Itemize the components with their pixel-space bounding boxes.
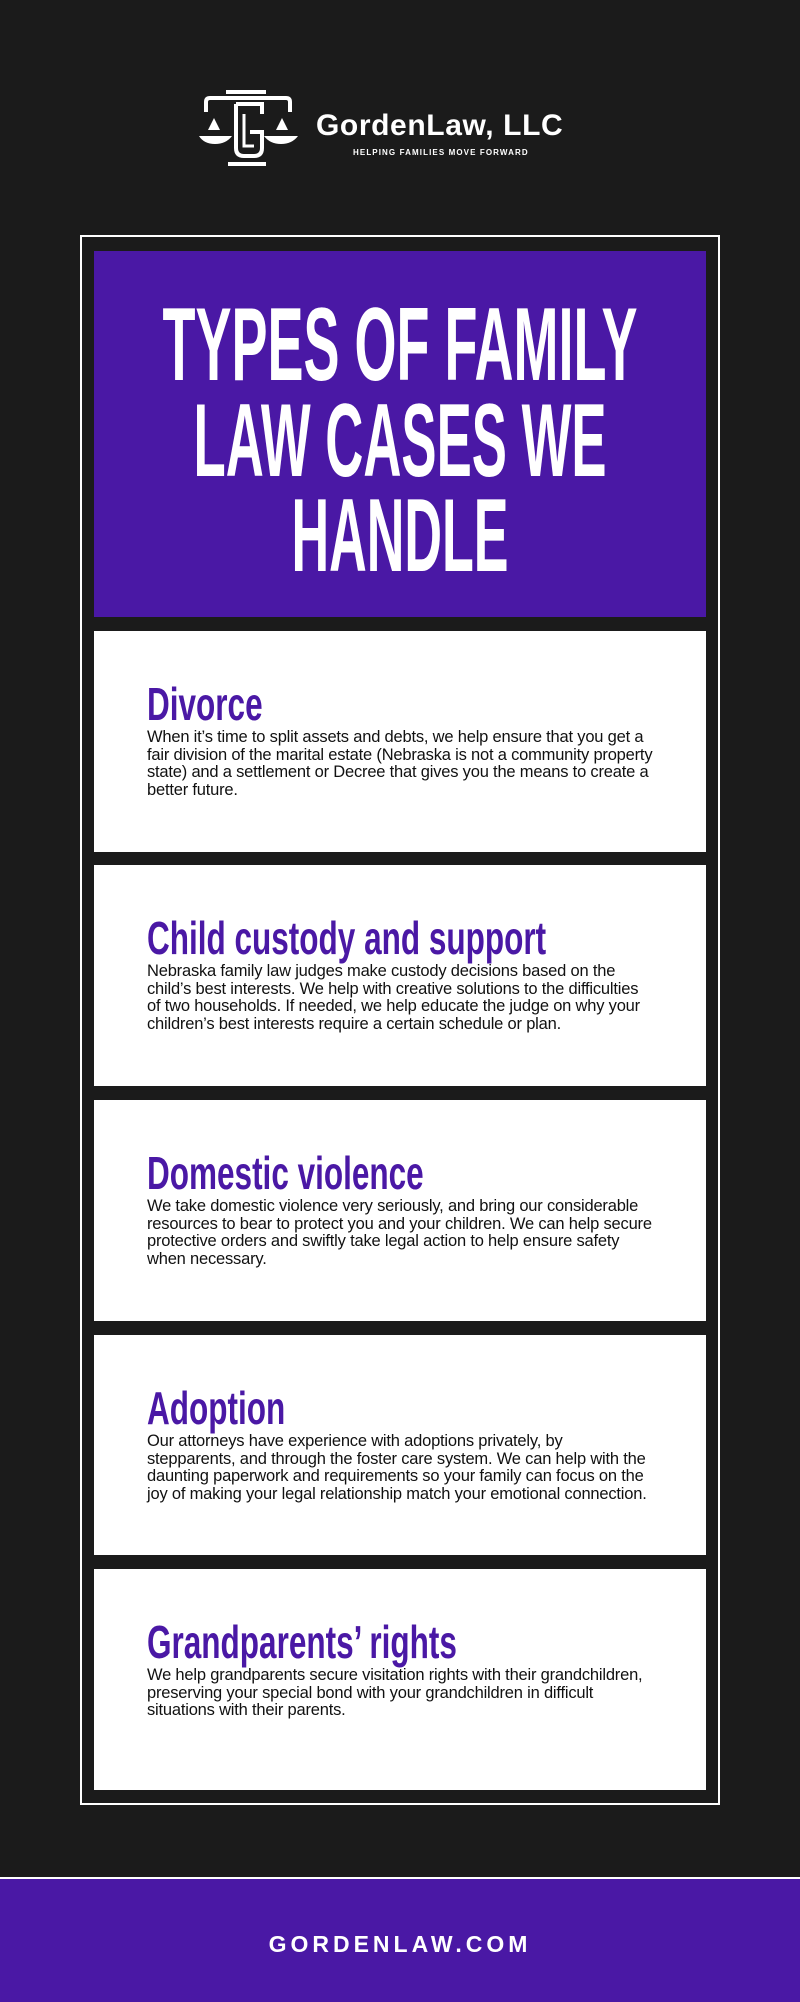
icon: scales with G [199, 90, 298, 166]
card: child custody: children’s best interests require a certain schedule or plan. [147, 1014, 561, 1032]
card: adoption: Adoption [147, 1382, 285, 1434]
card: divorce: When it’s time to split assets and debts, we help ensure that you get a [147, 728, 643, 746]
card: adoption: daunting paperwork and requirements so your family can focus on the [147, 1467, 644, 1485]
card: grandparents: preserving your special bond with your grandchildren in difficult [147, 1684, 593, 1702]
footer url: GORDENLAW.COM [269, 1931, 531, 1957]
card: domestic violence [94, 1100, 706, 1321]
card: divorce: Divorce [147, 678, 263, 730]
card: child custody: of two households. If needed, we help educate the judge on why your [147, 997, 640, 1015]
card: adoption: joy of making your legal relationship match your emotional connection. [147, 1484, 647, 1502]
card: divorce [94, 631, 706, 852]
tagline: HELPING FAMILIES MOVE FORWARD [353, 148, 529, 157]
card: grandparents: situations with their parents. [147, 1701, 346, 1719]
title panel [94, 251, 706, 617]
frame [80, 235, 720, 1805]
card: grandparents: Grandparents’ rights [147, 1616, 457, 1668]
card: child custody: Nebraska family law judges make custody decisions based on the [147, 962, 615, 980]
footer [0, 1877, 800, 2002]
card: adoption: stepparents, and through the foster care system. We can help with the [147, 1450, 646, 1468]
card: divorce: state) and a settlement or Decree that gives you the means to create a [147, 763, 648, 781]
card: domestic violence: Domestic violence [147, 1147, 424, 1199]
card: domestic violence: protective orders and swiftly take legal action to help ensure safety [147, 1232, 619, 1250]
card: adoption: Our attorneys have experience with adoptions privately, by [147, 1432, 562, 1450]
card: child custody: Child custody and support [147, 912, 546, 964]
card: child custody [94, 865, 706, 1086]
card: domestic violence: resources to bear to protect you and your children. We can help secure [147, 1214, 652, 1232]
card: adoption [94, 1335, 706, 1555]
logo [199, 90, 563, 166]
card: child custody: child’s best interests. We help with creative solutions to the difficulties [147, 980, 638, 998]
card: divorce: fair division of the marital estate (Nebraska is not a community property [147, 746, 652, 764]
logo text: GordenLaw, LLC [316, 109, 563, 142]
card: grandparents [94, 1569, 706, 1790]
card: domestic violence: We take domestic violence very seriously, and bring our considerable [147, 1197, 638, 1215]
card: divorce: better future. [147, 780, 238, 798]
card: domestic violence: when necessary. [147, 1250, 267, 1268]
card: grandparents: We help grandparents secure visitation rights with their grandchildren, [147, 1666, 642, 1684]
